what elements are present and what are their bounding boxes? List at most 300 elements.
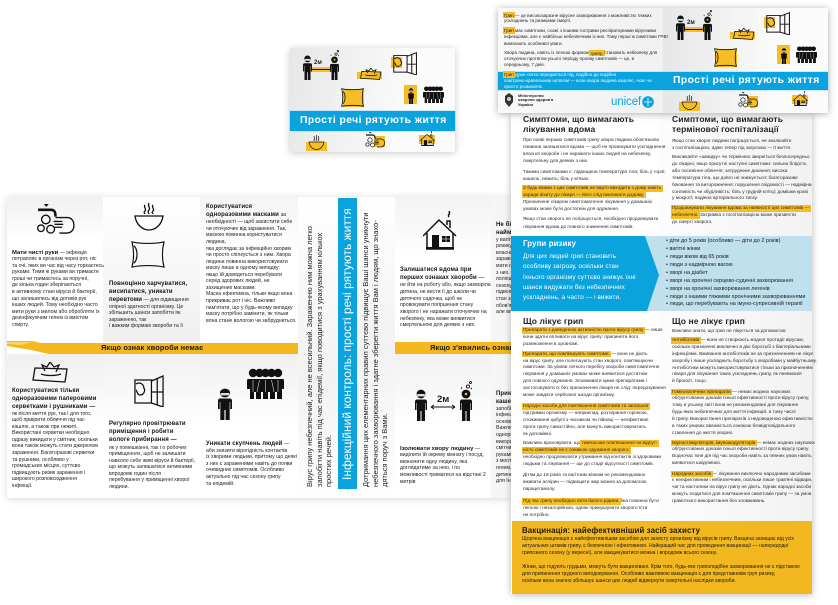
icon: crowd of people xyxy=(247,368,284,399)
text: isolate xyxy=(400,446,486,485)
text: partly hidden column bottom: смітник xyxy=(496,445,514,451)
text: fluids: Під час грипу необхідно пити багато рідини. Їжа повинна бути xyxy=(523,499,659,504)
text: intro: Важливо знати, що грип не лікується за допомогою: xyxy=(672,329,786,334)
list: risk groups: • хворі на діабет xyxy=(666,270,708,276)
text: partly hidden column bottom xyxy=(496,406,524,484)
text: clean hands: та очі, яких ви час від часу торкаєтесь xyxy=(12,263,104,269)
text: partly hidden column top: власних xyxy=(496,250,516,256)
text: emergency signs: блювання та виторожнення; порушення свідомості — надмірна xyxy=(672,183,812,188)
heading: disposable tissues xyxy=(12,388,96,410)
text: homeopathy: й грипу. Використання препаратів з недоведеною ефективністю xyxy=(672,417,813,422)
text: eat and sleep xyxy=(109,297,189,329)
text: vaccination para 2: для припинення грудного вигодовування. Особливо важливою вакцинація є для представників груп ризику, xyxy=(522,571,775,577)
text: isolate: можливості триматися на відстані 2 xyxy=(400,472,486,478)
text: symptom list xyxy=(523,169,666,183)
text: symptom list: Такими симптомами є: підвищена температура тіла; біль у горлі; xyxy=(523,170,666,175)
text: masks: захищених масками. xyxy=(206,285,256,291)
text: masks: якщо їй доведеться перебувати xyxy=(206,272,282,278)
text: masks: чи просто спілкується з ним. Хвора xyxy=(206,252,291,258)
text: ventilate: навколо себе живі віруси й бактерії, xyxy=(109,458,195,464)
text: fluids: легкою і некалорійною, однак примушувати хворого їсти xyxy=(523,506,647,511)
logo: ministry of health xyxy=(504,93,554,109)
text: symptomatic drugs: лікування у домашніх умовах може виявитися достатнім xyxy=(523,372,647,377)
list: risk groups: • хворі на хронічні серцево-судинні захворювання xyxy=(666,278,793,284)
text: partly hidden column top: обов'язково xyxy=(496,303,524,309)
text: symptomatic drugs xyxy=(523,352,666,400)
text: disposable tissues: підвищують ризик зараження і xyxy=(12,470,85,476)
text: eat and sleep: опірної здатності організму. Це xyxy=(109,304,183,310)
text: rotated intro: простих речей. xyxy=(324,435,333,487)
icon: masked person xyxy=(218,388,232,420)
text: vaccination para 1: Щорічна вакцинація є найефективнішим засобом для захисту організму від вірусів грипу. Вакцина захищає від усіх xyxy=(522,536,794,542)
text: stay at home: дитина, не вести її до школи чи xyxy=(400,289,476,295)
text: stay at home: не йти на роботу або, якщо захворіла xyxy=(400,282,491,288)
text: folk remedies warning: чаї та настоянки на вірус грипу не діють. Однак народні засоби xyxy=(672,485,811,490)
text: partly hidden column top xyxy=(496,237,524,315)
icon: hand washing xyxy=(738,92,758,108)
text: clean hands: гроші чи тримаєтесь за поручні, xyxy=(12,276,89,282)
title text: Прості речі рятують життя xyxy=(673,75,820,86)
text: stay at home xyxy=(400,282,491,328)
icon marker: hand xyxy=(747,96,758,107)
small card: simple things save lives xyxy=(290,48,455,152)
label: 2 m: 2м xyxy=(314,60,322,66)
text: folk remedies warning xyxy=(672,472,812,506)
heading: partly hidden column bottom: Прикривати xyxy=(496,391,533,397)
heading: partly hidden column bottom xyxy=(496,390,533,405)
text: disposable tissues: Використані серветки необхідно xyxy=(12,430,89,436)
heading: risk groups: Групи ризику xyxy=(523,239,576,248)
icon marker: hand xyxy=(374,136,385,147)
text: ventilate: людини. xyxy=(109,484,129,490)
text: relief is not recovery: необхідно продовжувати утримання від контактів зі здоровими xyxy=(523,455,661,460)
text: flu symptoms: інфекціями, але є найбільш небезпечним із них. Тому перші ж симптоми ГРВІ xyxy=(504,34,668,39)
icon marker: masked person xyxy=(404,85,417,104)
text: masks xyxy=(206,218,296,324)
text: rotated intro: Вірус грипу небезпечний, але не всесильний. Зараженню ним можна легко xyxy=(305,226,314,487)
title bar xyxy=(498,72,828,90)
text: antibiotics xyxy=(672,338,817,386)
text: folk remedies warning: є неефективним і небезпечним, оскільки лише трав'яні відвари, xyxy=(672,478,812,483)
panel: column 1 bottom background xyxy=(7,354,103,498)
text: antivirals: вони здатні впливати на вірус грипу: припиняти його xyxy=(523,335,638,340)
heading: eat and sleep: висипатися, уникати xyxy=(109,289,173,295)
text: isolate: доглядатиме за нею, і по xyxy=(400,465,460,471)
icon: isolate sick person, 2 m distance xyxy=(415,381,472,421)
text: masks: прикриває рот і ніс. Важливо xyxy=(206,298,275,304)
heading: ventilate: Регулярно провітрювати xyxy=(109,421,186,427)
text: avoid crowds: та епідемій. xyxy=(206,481,234,487)
text: ventilate: впродовж годин після xyxy=(109,471,161,477)
text: flu symptoms xyxy=(504,28,668,47)
highlighted warning: stay home xyxy=(523,186,661,199)
text: masks: чи оточуючих від зараження. Так, xyxy=(206,226,286,232)
icon: ministry emblem xyxy=(504,93,514,108)
text: folk remedies: споживання цибулі з часником чи пійнаці — неефективні xyxy=(523,418,648,423)
text: risk groups: їхнього організму суттєво знижує їхні xyxy=(523,274,636,281)
text: partly hidden column bottom: основний xyxy=(496,419,519,425)
heading: masks: одноразовими масками за xyxy=(206,212,286,218)
text: antibiotics: й бронхіт, тощо. xyxy=(672,379,707,384)
text: antibiotics: Антибіотики можуть використовуватися тільки за призначенням xyxy=(672,366,813,371)
text: emergency signs: Викликайте «швидку» чи терміново зверніться безпосередньо xyxy=(672,155,810,160)
text: relief is not recovery: людьми та лікування — ще до стадії відсутності симптомів. xyxy=(523,462,654,467)
text: partly hidden column top: підвоює xyxy=(496,289,515,295)
panel: column 3 bottom background xyxy=(200,354,298,498)
heading: disposable tissues: серветками і рушниками — xyxy=(12,404,95,410)
text: flu intro xyxy=(504,13,652,24)
text: homeopathy: тому в усьому світі вони не рекомендовані для лікування xyxy=(672,403,798,408)
text: partly hidden column bottom: дитини xyxy=(496,472,513,478)
ministry name xyxy=(518,94,553,108)
text: masks: маску потрібно замінити, як тільки xyxy=(206,311,288,317)
text: flu symptoms: Грип має симптоми, схожі з іншими гострими респіраторними вірусними xyxy=(504,28,656,33)
icon: two people 2 m apart xyxy=(676,10,716,40)
text: emergency signs xyxy=(672,155,812,203)
text: isolate: виділити їй окрему кімнату і посуд, xyxy=(400,452,484,458)
icon marker: window xyxy=(391,57,402,68)
label: 2 m: 2м xyxy=(687,20,695,26)
heading: masks: Користуватися xyxy=(206,204,252,210)
icon: house xyxy=(423,211,456,250)
icon: hand washing xyxy=(37,204,75,234)
text: continue treatment: лікування вдома до повного зникнення симптомів. xyxy=(523,225,634,230)
text: flu symptoms: вимагають особливої уваги. xyxy=(504,41,563,46)
text: clean hands: спирту. xyxy=(12,322,29,328)
text: hospitalisation: з госпіталізацією, адже тепер під загрозою — її життя. xyxy=(672,146,791,151)
text: emergency signs: температура тіла, що довго не знижується; багаторазове xyxy=(672,176,798,181)
text: rotated outro: Дотримання цих елементарних правил суттєво підвищує Ваші шанси уникнути xyxy=(361,212,370,487)
text: folk remedies warning: грамотного використання без зловживань. xyxy=(672,499,766,504)
text: ventilate: приміщеннях, щоб не залишати xyxy=(109,451,186,457)
icon: bowl xyxy=(308,135,324,150)
heading: stay at home: Залишатися вдома при xyxy=(400,267,472,273)
list: risk groups: • люди з надмірною вагою xyxy=(666,262,733,268)
highlighted warning: danger: до смерті хворого. xyxy=(672,220,712,225)
ministry name: охорони здоров'я xyxy=(518,97,553,102)
text: symptomatic drugs: Препарати, що пом'якшують симптоми, — вони не діють xyxy=(523,352,648,357)
text: rotated outro xyxy=(361,212,389,487)
text: aspirin warning: парацетамолу. xyxy=(523,486,555,492)
text: masks: вона стане вологою чи забрудниться. xyxy=(206,318,296,324)
text: vaccination para 1 xyxy=(522,536,794,557)
heading: disposable tissues: Користуватися тільки xyxy=(12,388,79,394)
text: homeopathy: будь-яких небезпечних для життя інфекцій, в тому числі xyxy=(672,410,796,415)
text: partly hidden column top: зараження xyxy=(496,256,522,262)
text: symptomatic drugs: симптоми. За умови легкого перебігу хвороби симптоматичне xyxy=(523,365,659,370)
text: eat and sleep: збільшить шанси запобігти як xyxy=(109,310,180,316)
panel: column 2 bottom background xyxy=(103,354,200,498)
list: risk groups: • хворі на хронічні захворювання легенів xyxy=(666,286,770,292)
text: homeopathy: в таких умовах вважається ознакою безвідповідального xyxy=(672,424,795,429)
label: 2 m: 2м xyxy=(437,394,449,405)
text: antibiotics: інфекціями. Вживання антибіотиків не за призначенням не лікує xyxy=(672,352,813,357)
text: risk groups: ускладнень, а часто — і вижити. xyxy=(523,294,621,301)
icon marker: pillow xyxy=(716,49,737,67)
logo: unicef xyxy=(611,94,655,110)
text: antivirals xyxy=(523,327,663,348)
text: partly hidden column top: стан за xyxy=(496,296,513,302)
icon marker: house xyxy=(419,135,435,144)
text: flu intro: ускладнень та ризиками смерті. xyxy=(504,18,571,23)
highlighted warning: stay home: З будь-якими з цих симптомів не варто виходити з дому навіть xyxy=(523,186,661,191)
icon: bowl of hot food xyxy=(134,203,164,231)
blue vertical strip xyxy=(338,198,357,489)
list: risk groups: • люди з іншими тяжкими хронічними захворюваннями xyxy=(666,294,805,300)
text: treatment xyxy=(523,200,652,213)
text: continue treatment: Якщо стан хворого не погіршується, необхідно продовжувати xyxy=(523,217,658,222)
band label: no signs: Якщо ознак хвороби немає xyxy=(101,343,203,352)
text: vaccination para 1: актуальних штамів грипу, є безпечною і ефективною. Найкращий час для проведення вакцинації — напередодні xyxy=(522,543,788,549)
icon marker: window xyxy=(764,17,775,28)
text: fluids xyxy=(523,498,659,519)
text: flu transmission: повітряно-крапельним шляхом — коли хвора людина кашляє, чхає чи xyxy=(504,78,652,83)
highlighted warning: danger: Продовжувати лікування вдома за наявності цих симптомів — xyxy=(672,206,809,211)
text: partly hidden column bottom: з могли xyxy=(496,458,514,464)
text: immunostimulants: Водночас їхня дія під час хвороби навіть за певних умов навіть xyxy=(672,454,812,459)
highlighted warning: stay home: заради візиту до лікаря — його слід викликати додому. xyxy=(523,193,644,198)
icon: open window xyxy=(134,375,164,407)
icon: wipes xyxy=(32,362,68,383)
text: home treatment xyxy=(523,138,665,164)
text: homeopathy xyxy=(672,390,813,437)
heading: symptoms for hospitalisation: термінової госпіталізації xyxy=(672,124,779,134)
icon: hand washing xyxy=(366,132,385,148)
text: clean hands: руками. Тими ж руками ви тримаєте xyxy=(12,269,99,275)
text: partly hidden column top: поліпшить xyxy=(496,276,521,282)
text: partly hidden column bottom: одноразові xyxy=(496,432,522,438)
text: relief is not recovery: ність симптомів не є ознакою одужання хворого: xyxy=(523,448,630,453)
heading: what treats flu: Що лікує грип xyxy=(523,316,583,326)
text: risk groups: Для цих людей грип становить xyxy=(523,253,616,260)
text: fluids: не потрібно. xyxy=(523,513,550,518)
text: masks: маску лише в одному випадку: xyxy=(206,265,280,271)
text: isolate: Ізолювати хвору людину — xyxy=(400,446,480,452)
text: vaccination para 2: оскільки вона значно збільшує шанси цих людей відвернути смертельні наслідки хвороби. xyxy=(522,578,736,584)
band: if signs appeared xyxy=(395,342,511,354)
text: partly hidden column bottom: для Ін xyxy=(496,478,511,484)
panel: column 6 background xyxy=(491,197,511,498)
text: clean hands xyxy=(12,250,104,328)
text: partly hidden column bottom: гелем, xyxy=(496,465,511,471)
title: rotated infection control: Інфекційний контроль: прості речі рятують життя xyxy=(340,208,354,480)
heading: ventilate: вологе прибирання — xyxy=(109,437,177,443)
text: antibiotics: хворобу і лише ускладнить боротьбу з хворобами у майбутньому. xyxy=(672,359,817,364)
text: emergency signs: до лікарні, якщо присутні наступні симптоми: сильна блідість xyxy=(672,162,807,167)
text: aspirin warning: Дітям до 18 років та вагітним жінкам не рекомендовано xyxy=(523,472,645,478)
list: risk groups xyxy=(666,238,805,309)
panel: column 2 top background xyxy=(103,197,200,342)
text: emergency signs: сонливість чи збудливість; біль у грудній клітці; домішки крові xyxy=(672,190,808,195)
icon: window xyxy=(393,52,417,75)
unicef word: unicef xyxy=(611,96,641,108)
heading: symptoms for hospitalisation xyxy=(672,114,783,135)
text: folk remedies xyxy=(523,403,648,438)
text: symptom list: кашель; нежить; біль у м'язах. xyxy=(523,177,590,182)
heading: disposable tissues: одноразовими паперовими xyxy=(12,396,96,402)
heading: eat and sleep: Повноцінно харчуватися, xyxy=(109,280,187,286)
heading: symptoms for home treatment xyxy=(523,114,634,134)
icon marker: bowl xyxy=(679,102,700,111)
heading: stay at home: перших ознаках хвороби — xyxy=(400,275,485,281)
text: folk remedies warning: Народних засобів — лікування виключно народними засобами xyxy=(672,472,811,476)
text: stay at home: небезпеку, яка може виявитися xyxy=(400,316,475,322)
text: disposable tissues: кашлю, а також при нежиті. xyxy=(12,424,78,430)
text: folk remedies: підтримки організму — наприклад, розтирання горілкою, xyxy=(523,411,648,416)
panel: rotated outro column xyxy=(357,197,395,498)
icon marker: pillow xyxy=(343,89,364,107)
text: clean hands: мити руки з милом або обробляти їх xyxy=(12,309,100,315)
highlighted warning: danger xyxy=(672,206,809,227)
panel: rotated intro column xyxy=(298,197,338,498)
text: flu intro: Грип — це високозаразне вірусне захворювання з можливістю тяжких xyxy=(504,13,652,18)
icon: crowd xyxy=(796,46,817,63)
text: partly hidden column bottom: інфекції xyxy=(496,412,515,418)
text: masks: людина повинна використовувати xyxy=(206,259,288,265)
list: risk groups: • вагітні жінки xyxy=(666,246,700,252)
text: eat and sleep: перевтоми — для підвищення xyxy=(109,297,189,303)
icon marker: wipes xyxy=(730,32,755,39)
panel: column 5 bottom background xyxy=(395,354,491,498)
text: eat and sleep: зараженню, так xyxy=(109,317,146,323)
text: continue treatment xyxy=(523,216,658,231)
text: avoid crowds: із хворими людьми, притому що деякі xyxy=(206,454,297,460)
text: clean hands: інших людей. Тому необхідно часто xyxy=(12,302,98,308)
text: masks: яка доглядає за інфекційно хворим xyxy=(206,246,291,252)
panel: risk groups xyxy=(511,236,812,311)
text: homeopathy: обґрунтованих доказів їхньої ефективності проти вірусу грипу, xyxy=(672,396,809,401)
text: partly hidden column bottom: запобігти xyxy=(496,406,518,412)
text: symptomatic drugs: на вірус грипу, але полегшують стан хворого, пом'якшуючи xyxy=(523,358,653,364)
arrow-shaped blue block xyxy=(511,236,660,311)
text: disposable tissues: щоб прикрити обличчя під час xyxy=(12,417,85,423)
icon: pillow xyxy=(341,88,364,107)
text: flu contagious period: оточуючих протягом усього періоду прояву симптомів — це, в xyxy=(504,56,634,61)
text: clean hands: що залишились від дотиків рук xyxy=(12,296,86,302)
text: immunostimulants: виявитися шкідливою. xyxy=(672,461,721,466)
text: disposable tissues: та рушники, особливо у xyxy=(12,457,69,463)
heading: ventilate xyxy=(109,420,186,443)
text: partly hidden column bottom: використані xyxy=(496,439,524,445)
icon: wipes xyxy=(733,28,755,40)
text: disposable tissues: зараження. Багаторазові серветки xyxy=(12,450,94,456)
icon: sick and masked people 2 m apart xyxy=(303,50,339,80)
text: avoid crowds: актуально під час сезону грипу xyxy=(206,474,281,480)
text: hospitalisation: Якщо стан хворої людини погіршується, не зволікайте xyxy=(672,139,791,144)
text: symptomatic drugs: може завдати серйозної шкоди організму. xyxy=(523,393,615,398)
text: partly hidden column top: але ви xyxy=(496,309,512,315)
text: stay at home: хворого і не наражати оточуючих на xyxy=(400,309,487,315)
text: rotated intro xyxy=(305,226,333,487)
text: stay at home: дитячого садочка, щоб не xyxy=(400,296,462,302)
icon: pillow xyxy=(714,48,737,67)
text: antibiotics: Антибіотиків — вони не створюють жодної протидії вірусам, xyxy=(672,338,804,343)
list: risk groups: • люди, що перебувають на імуно-супресивній терапії xyxy=(666,301,803,307)
text: folk remedies warning: можуть згодитися для пом'якшення симптомів грипу — за умов xyxy=(672,492,811,497)
icon: house xyxy=(420,131,435,146)
icon: yellow marker under two people xyxy=(310,67,335,72)
text: clean hands: в активному стані віруси й бактерії, xyxy=(12,289,97,295)
text: antivirals: розмноження в організмі. xyxy=(523,342,579,347)
icon marker: bowl xyxy=(306,142,327,151)
text: avoid crowds: очевидних симптомів. Особливо xyxy=(206,467,284,473)
heading: partly hidden column top: наймати xyxy=(496,230,522,236)
text: flu contagious period: середньому, 7 днів. xyxy=(504,62,545,67)
text: flu contagious period: Хвора людина, навіть із легкою формою грипу, становить небезпеку для xyxy=(504,50,657,55)
text: stay at home: провокувати погіршення стану xyxy=(400,302,473,308)
icon: masked person xyxy=(408,88,414,104)
text: folk remedies: Народні засоби для пом'якшення симптомів та загальної xyxy=(523,404,648,409)
text: clean hands: де кілька годин зберігаються xyxy=(12,282,81,288)
heading: partly hidden column bottom: кашель xyxy=(496,399,519,405)
text: antibiotics: лікаря для лікування таких ускладнень грипу, як пневмонія xyxy=(672,372,802,377)
heading: what does not treat flu: Що не лікує грип xyxy=(672,316,745,326)
text: emergency signs: або посиніння обличчя; затруднене дихання; висока xyxy=(672,169,787,174)
text: vaccination para 1: грипозного сезону (у вересні), але вакцинуватися можна і впродовж всього сезону. xyxy=(522,550,717,556)
title bar xyxy=(290,111,455,131)
text: vaccination para 2: Жінки, що годують грудьми, можуть бути вакциновані. Крім того, будь-яке грипоподібне захворювання не є підставою xyxy=(522,564,800,570)
icon: wipes xyxy=(360,68,382,80)
text: ventilate: як у помешканні, так і о робочих xyxy=(109,445,186,451)
text: flu transmission: просто розмовляє. xyxy=(504,84,543,89)
ministry name: України xyxy=(518,102,533,107)
icon: masked person xyxy=(781,48,787,64)
text: masks: Маска ефективна, тільки якщо вона xyxy=(206,291,292,297)
text: partly hidden column bottom: Важливо xyxy=(496,425,517,431)
icon: pillow xyxy=(131,241,165,268)
text: partly hidden column top: у вагітних xyxy=(496,237,519,243)
panel: column 1 top background xyxy=(7,197,103,342)
text: home treatment: смертельну для деяких з них. xyxy=(523,159,588,164)
text: folk remedies: як допоміжні. xyxy=(523,432,552,437)
text: masks: маскою повинна користуватися xyxy=(206,232,282,238)
text: masks: необхідності — щоб захистити себе xyxy=(206,219,292,225)
text: disposable tissues: широкого розповсюдження xyxy=(12,476,77,482)
panel: vaccination xyxy=(512,521,812,594)
text: ventilate xyxy=(109,444,195,490)
heading: symptoms for home treatment: лікування вдома xyxy=(523,124,595,134)
icon marker: wipes xyxy=(357,72,382,79)
text: flu contagious period xyxy=(504,50,657,68)
text: hospitalisation xyxy=(672,138,791,152)
text: vaccination para 2 xyxy=(522,564,800,585)
card: leaflet back cover xyxy=(498,8,828,113)
text: disposable tissues: як після миття рук, так і для того, xyxy=(12,411,92,417)
text: avoid crowds xyxy=(206,440,297,487)
text: isolate: метрів xyxy=(400,479,415,485)
icon marker: house xyxy=(792,95,808,104)
list: risk groups: • люди віком від 65 років xyxy=(666,254,729,260)
heading: symptoms for hospitalisation: Симптоми, що вимагають xyxy=(672,114,783,124)
band: if no signs of illness xyxy=(7,341,298,354)
text: ventilate: перебування у приміщенні хворої xyxy=(109,477,190,483)
text: partly hidden column top: мати сили xyxy=(496,263,520,269)
text: immunostimulants xyxy=(672,440,815,468)
icon: bowl xyxy=(681,95,698,110)
heading: stay at home xyxy=(400,266,485,281)
heading: vaccination: Вакцинація: найефективніший засіб захисту xyxy=(522,526,700,535)
text: homeopathy: Гомеопатичних препаратів — немає жодних наукових xyxy=(672,390,791,394)
heading: eat and sleep xyxy=(109,280,187,295)
text: eat and sleep: і важким формам хвороби та її xyxy=(109,323,183,329)
text: clean hands: дезінфікуючим гелем із вмістом xyxy=(12,315,88,321)
text: partly hidden column bottom: руками xyxy=(496,452,513,458)
text: masks: людина, xyxy=(206,239,226,245)
text: disposable tissues: громадських місцях, суттєво xyxy=(12,463,80,469)
text: disposable tissues: вони також можуть стати джерелом xyxy=(12,443,98,449)
text: aspirin warning xyxy=(523,472,647,492)
heading: masks xyxy=(206,204,286,218)
